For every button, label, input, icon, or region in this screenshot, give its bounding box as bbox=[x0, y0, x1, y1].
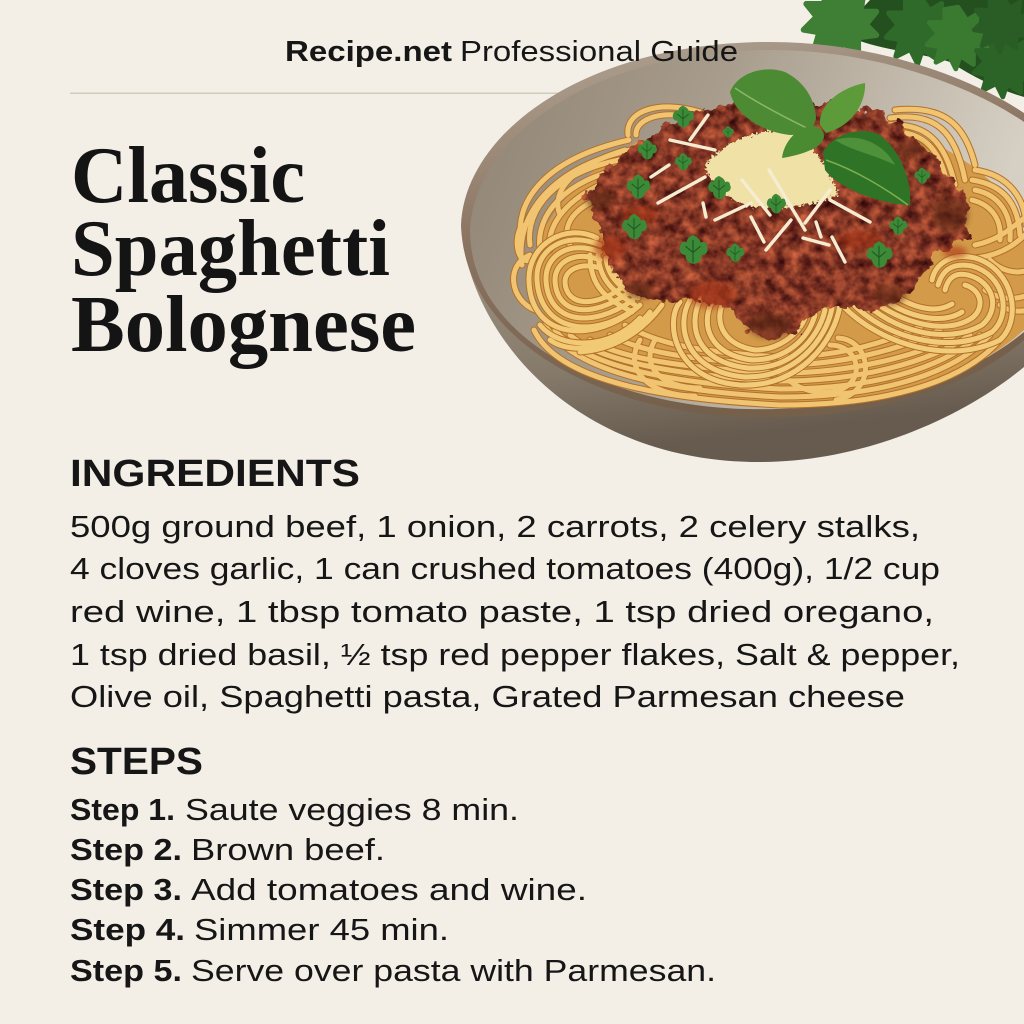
sauce red highlights bbox=[594, 206, 967, 308]
ingredients list: 4 cloves garlic, 1 can crushed tomatoes (400g), 1/2 cup bbox=[70, 551, 940, 586]
meat chunks bbox=[586, 142, 968, 338]
steps heading: STEPS bbox=[70, 741, 203, 783]
steps list: Step 3. bbox=[70, 872, 182, 907]
parsley flecks bbox=[622, 106, 930, 268]
bowl rim bbox=[461, 42, 1024, 417]
header text: Recipe.net bbox=[285, 36, 452, 68]
ingredients list: 500g ground beef, 1 onion, 2 carrots, 2 celery stalks, bbox=[70, 509, 920, 544]
steps list: Step 4. bbox=[70, 912, 185, 947]
steps list: Step 1. bbox=[70, 792, 175, 827]
title: Bolognese bbox=[71, 281, 416, 369]
bolognese sauce bbox=[586, 102, 968, 338]
grated parmesan bbox=[651, 115, 870, 262]
ingredients heading: INGREDIENTS bbox=[70, 453, 360, 495]
ingredients list: Olive oil, Spaghetti pasta, Grated Parmesan cheese bbox=[70, 679, 905, 714]
steps list: Serve over pasta with Parmesan. bbox=[191, 953, 716, 988]
ingredients list: red wine, 1 tbsp tomato paste, 1 tsp dried oregano, bbox=[70, 594, 934, 629]
steps list: Brown beef. bbox=[191, 832, 385, 867]
steps list: Saute veggies 8 min. bbox=[185, 792, 519, 827]
title: Classic bbox=[71, 132, 305, 220]
bowl body bbox=[461, 100, 1024, 462]
steps list: Step 2. bbox=[70, 832, 182, 867]
ingredients list bbox=[70, 509, 960, 714]
pasta base bbox=[530, 130, 1024, 404]
bowl inner wall bbox=[470, 50, 1024, 409]
title bbox=[71, 132, 416, 369]
steps list bbox=[70, 792, 716, 988]
basil leaves bbox=[730, 69, 910, 205]
divider rule bbox=[70, 92, 565, 94]
illustration: bowl of spaghetti bolognese bbox=[461, 42, 1024, 462]
steps list: Step 5. bbox=[70, 953, 182, 988]
pasta strands bbox=[514, 107, 1024, 405]
header text bbox=[285, 36, 738, 68]
steps list: Simmer 45 min. bbox=[194, 912, 449, 947]
ingredients list: 1 tsp dried basil, ½ tsp red pepper flakes, Salt & pepper, bbox=[70, 637, 960, 672]
title: Spaghetti bbox=[71, 205, 390, 293]
illustration: parsley garnish bbox=[804, 0, 1024, 97]
header text: Professional Guide bbox=[460, 36, 738, 68]
steps list: Add tomatoes and wine. bbox=[191, 872, 587, 907]
